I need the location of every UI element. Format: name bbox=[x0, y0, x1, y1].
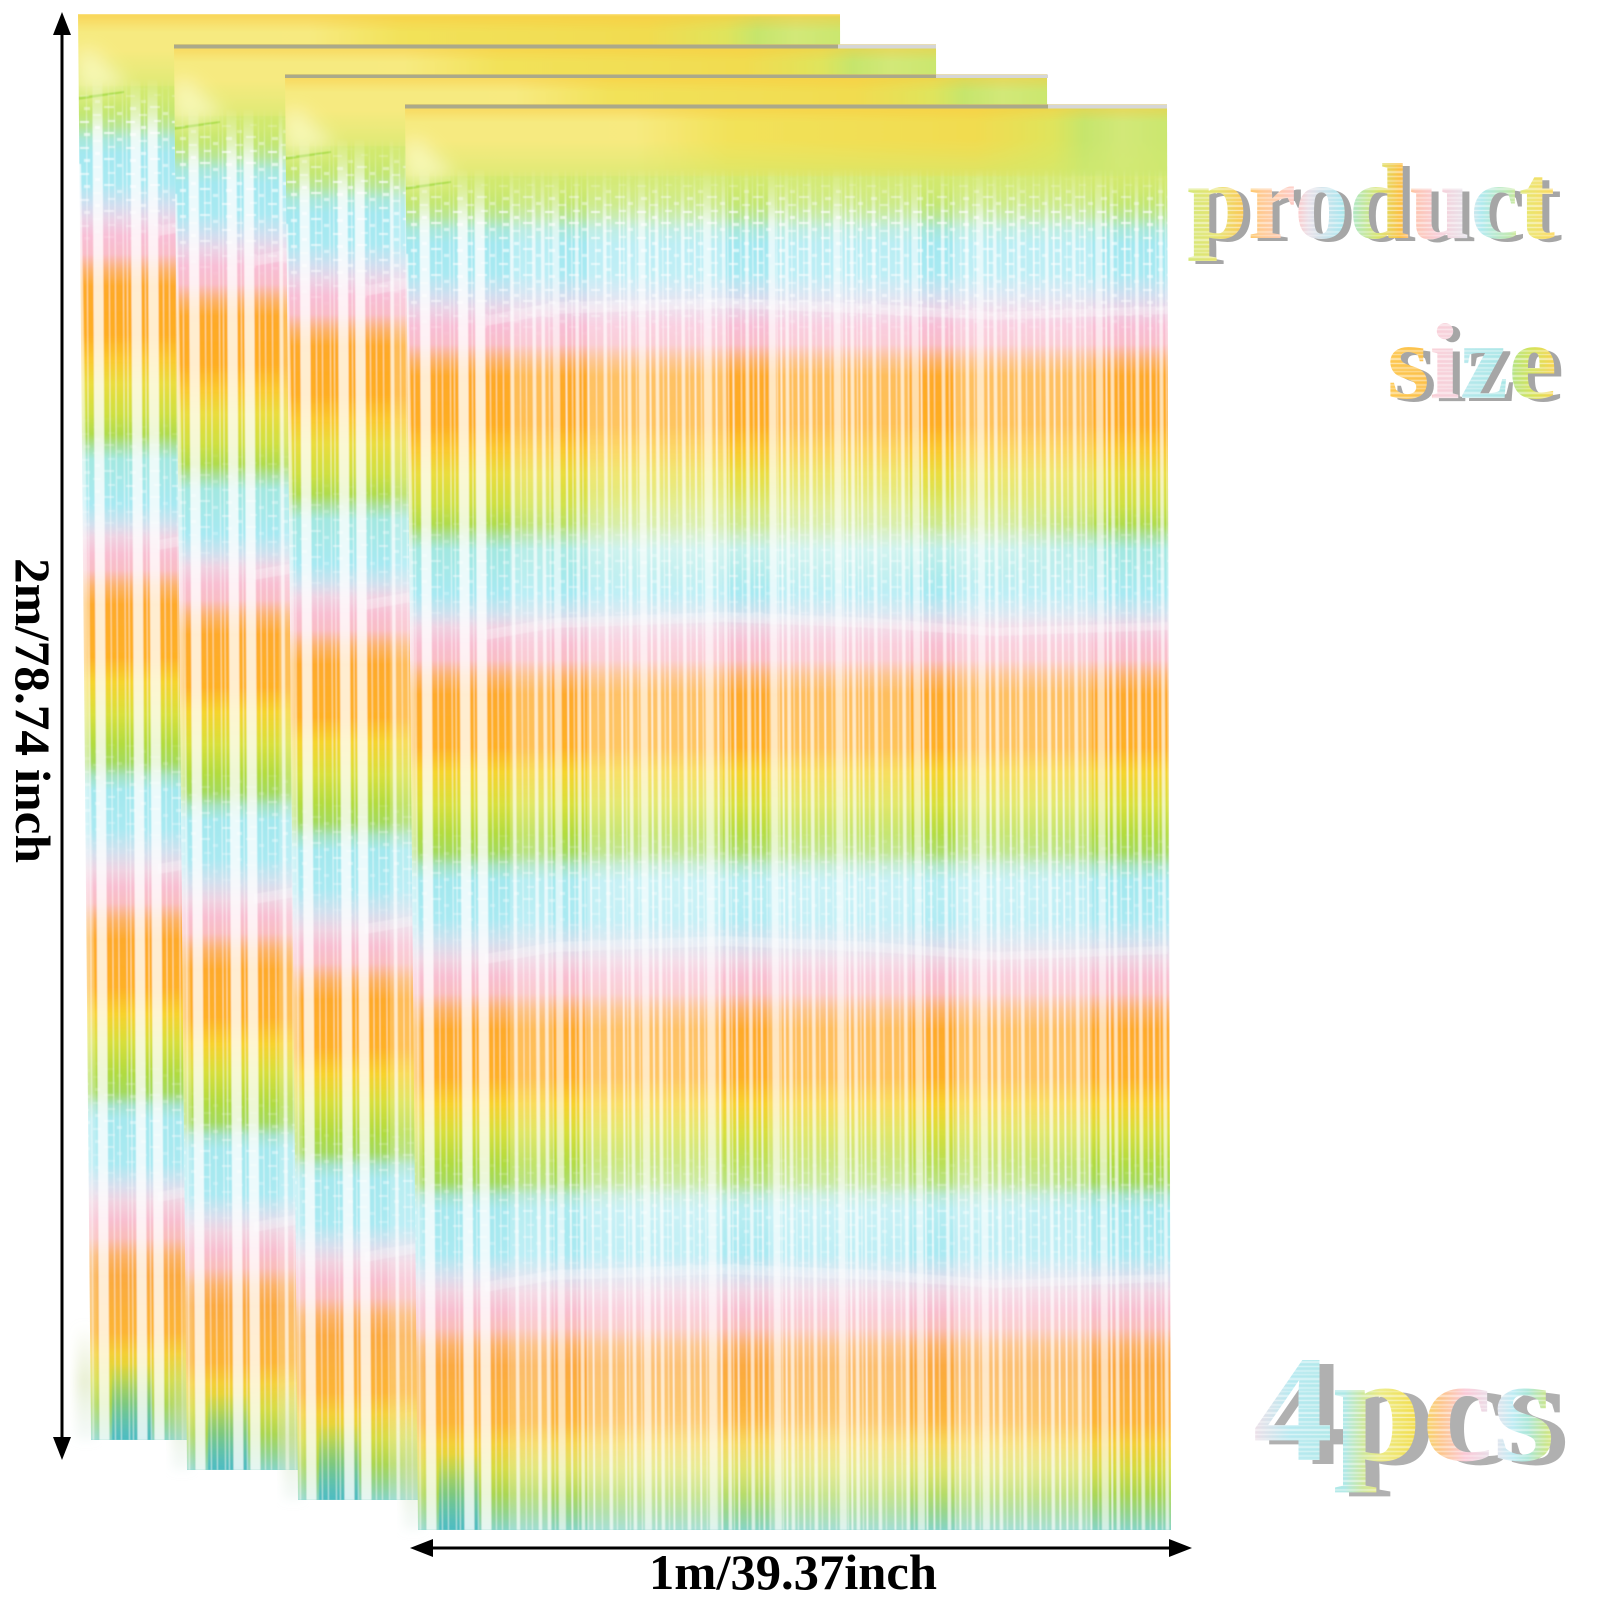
curtain 2 bbox=[172, 44, 946, 1474]
curtain 3 bbox=[283, 74, 1057, 1504]
top edges of curtains bbox=[174, 44, 1167, 108]
curtain 4 (front) bbox=[403, 104, 1177, 1534]
width label: 1m/39.37inch bbox=[649, 1544, 937, 1600]
height label: 2m/78.74 inch bbox=[5, 558, 61, 863]
heading: size: size bbox=[1387, 303, 1557, 422]
quantity label: 4pcs: 4pcs bbox=[1253, 1325, 1555, 1493]
curtain 1 (back) bbox=[76, 14, 850, 1444]
heading: product: product bbox=[1187, 143, 1555, 262]
width arrow bbox=[410, 1539, 1192, 1557]
height arrow bbox=[53, 12, 71, 1460]
